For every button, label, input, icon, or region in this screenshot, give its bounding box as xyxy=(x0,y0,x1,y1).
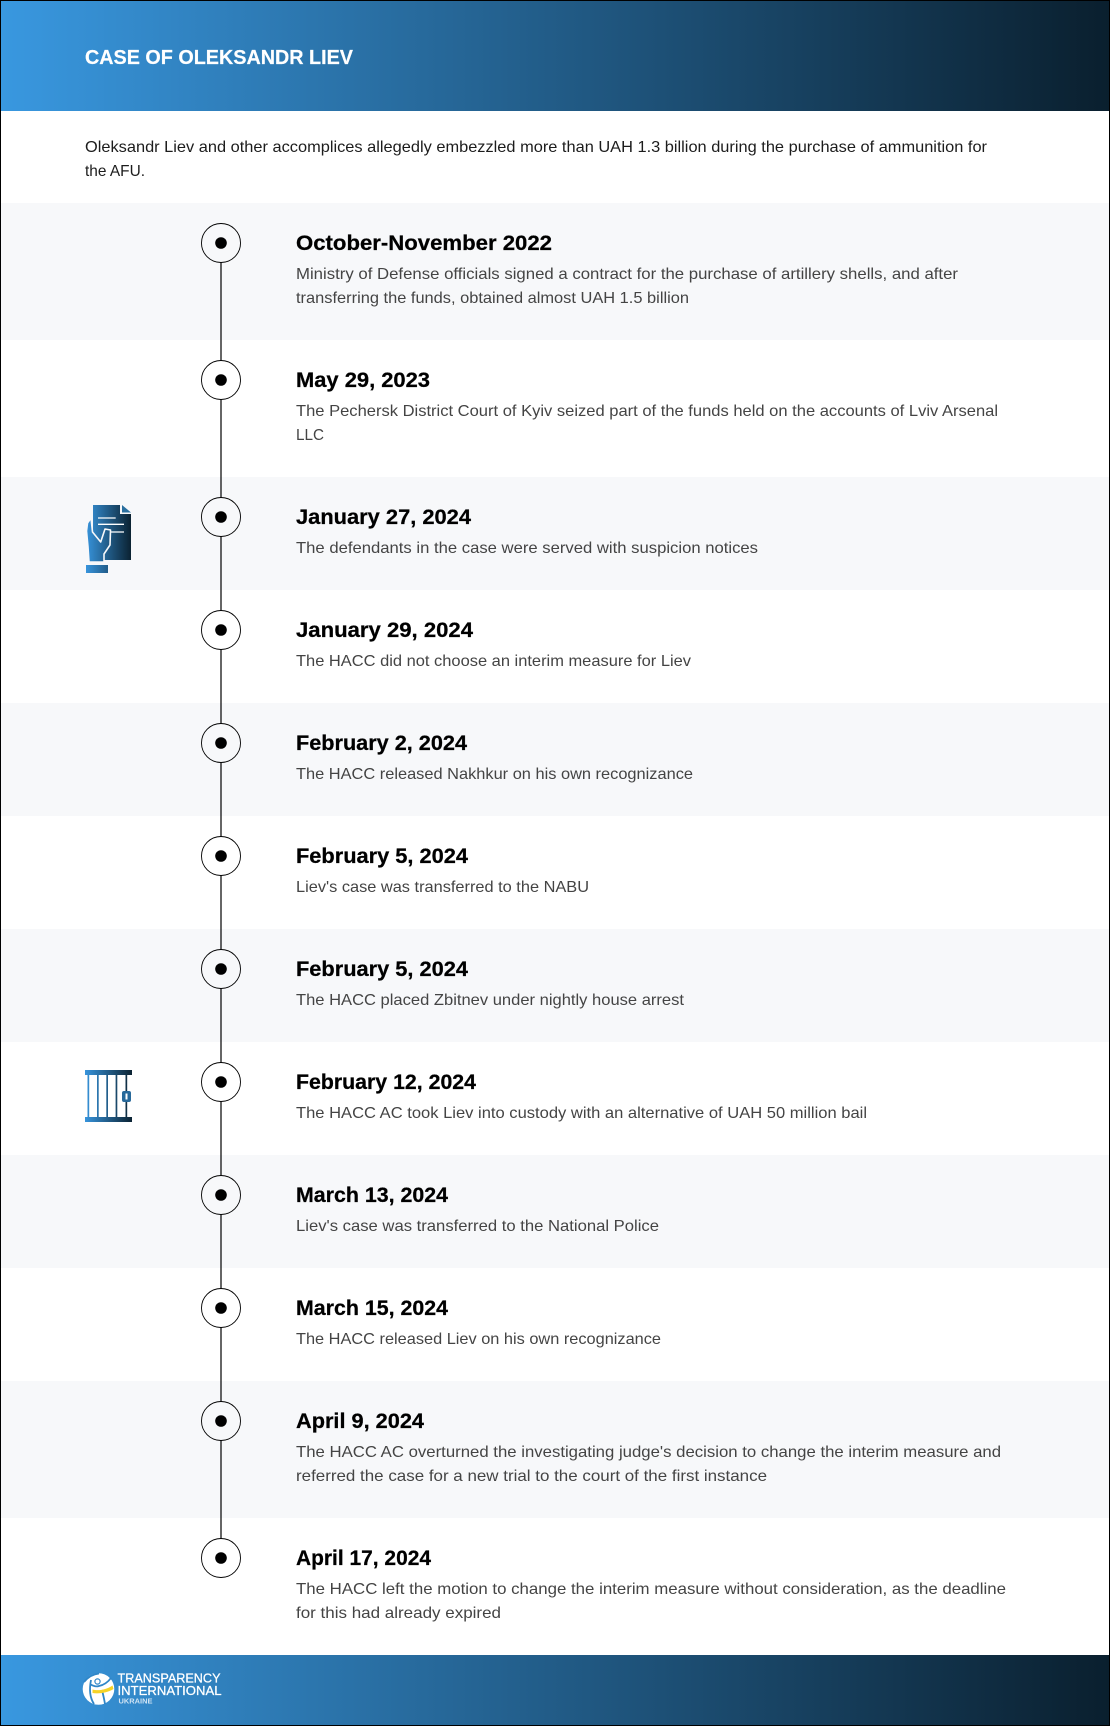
panel: January 27, 2024 xyxy=(0,477,1110,590)
panel: May 29, 2023 xyxy=(296,369,998,444)
intro text: the AFU. xyxy=(85,163,145,180)
panel: October-November 2022 xyxy=(0,203,1110,340)
panel: April 9, 2024: The HACC AC overturned the investigating judge's decision to change the interim measure and xyxy=(296,1444,1001,1461)
panel: January 27, 2024: January 27, 2024 xyxy=(296,506,471,529)
panel: March 15, 2024: The HACC released Liev on his own recognizance xyxy=(296,1331,661,1348)
logo: Transparency International Ukraine: TRANSPARENCY xyxy=(118,1672,221,1686)
panel: October-November 2022: Ministry of Defense officials signed a contract for the purchase of artillery shells, and after xyxy=(296,266,959,283)
panel: March 15, 2024: March 15, 2024 xyxy=(296,1297,448,1320)
panel: March 13, 2024: March 13, 2024 xyxy=(296,1184,448,1207)
panel: May 29, 2023: May 29, 2023 xyxy=(296,369,430,392)
panel: February 5, 2024: Liev's case was transferred to the NABU xyxy=(296,879,589,896)
icon: hand holding document xyxy=(86,505,131,573)
panel: January 27, 2024: The defendants in the case were served with suspicion notices xyxy=(296,540,758,557)
panel: March 13, 2024: Liev's case was transferred to the National Police xyxy=(296,1218,659,1235)
panel: October-November 2022: transferring the funds, obtained almost UAH 1.5 billion xyxy=(296,290,689,307)
panel: April 17, 2024: for this had already expired xyxy=(296,1605,501,1622)
panel: January 29, 2024 xyxy=(296,619,691,670)
panel: April 17, 2024: April 17, 2024 xyxy=(296,1547,431,1570)
panel: January 29, 2024: The HACC did not choose an interim measure for Liev xyxy=(296,653,691,670)
panel: February 5, 2024 house arrest: February 5, 2024 xyxy=(296,958,468,981)
panel: February 5, 2024 house arrest: The HACC placed Zbitnev under nightly house arrest xyxy=(296,992,685,1009)
logo: Transparency International Ukraine: INTERNATIONAL xyxy=(118,1684,222,1698)
panel: February 5, 2024: February 5, 2024 xyxy=(296,845,468,868)
icon: prison bars xyxy=(85,1070,132,1122)
panel: February 2, 2024: The HACC released Nakhkur on his own recognizance xyxy=(296,766,693,783)
panel: April 9, 2024 xyxy=(0,1381,1110,1518)
panel: March 13, 2024 xyxy=(0,1155,1110,1268)
intro text xyxy=(85,139,988,180)
panel: February 2, 2024 xyxy=(0,703,1110,816)
panel: April 17, 2024 xyxy=(296,1547,1006,1622)
panel: May 29, 2023: LLC xyxy=(296,427,324,444)
panel: May 29, 2023: The Pechersk District Court of Kyiv seized part of the funds held on the accounts of Lviv Arsenal xyxy=(296,403,998,420)
panel: February 2, 2024: February 2, 2024 xyxy=(296,732,467,755)
panel: February 5, 2024 house arrest xyxy=(0,929,1110,1042)
panel: April 17, 2024: The HACC left the motion to change the interim measure without consideration, as the deadline xyxy=(296,1581,1006,1598)
panel: March 15, 2024 xyxy=(296,1297,661,1348)
footer banner xyxy=(0,1655,1110,1726)
timeline xyxy=(202,224,240,1578)
header banner xyxy=(0,0,1110,111)
panel: January 29, 2024: January 29, 2024 xyxy=(296,619,473,642)
panel: October-November 2022: October-November 2022 xyxy=(296,232,552,255)
panel: April 9, 2024: April 9, 2024 xyxy=(296,1410,424,1433)
panel: February 5, 2024 xyxy=(296,845,589,896)
logo: Transparency International Ukraine xyxy=(83,1672,222,1706)
panel: April 9, 2024: referred the case for a new trial to the court of the first instance xyxy=(296,1468,767,1485)
title: CASE OF OLEKSANDR LIEV xyxy=(85,47,354,69)
panel: February 12, 2024: February 12, 2024 xyxy=(296,1071,476,1094)
panel: February 12, 2024: The HACC AC took Liev into custody with an alternative of UAH 50 million bail xyxy=(296,1105,867,1122)
logo: Transparency International Ukraine: UKRAINE xyxy=(118,1698,153,1706)
intro text: Oleksandr Liev and other accomplices allegedly embezzled more than UAH 1.3 billion during the purchase of ammunition for xyxy=(85,139,988,156)
panel: February 12, 2024 xyxy=(296,1071,867,1122)
